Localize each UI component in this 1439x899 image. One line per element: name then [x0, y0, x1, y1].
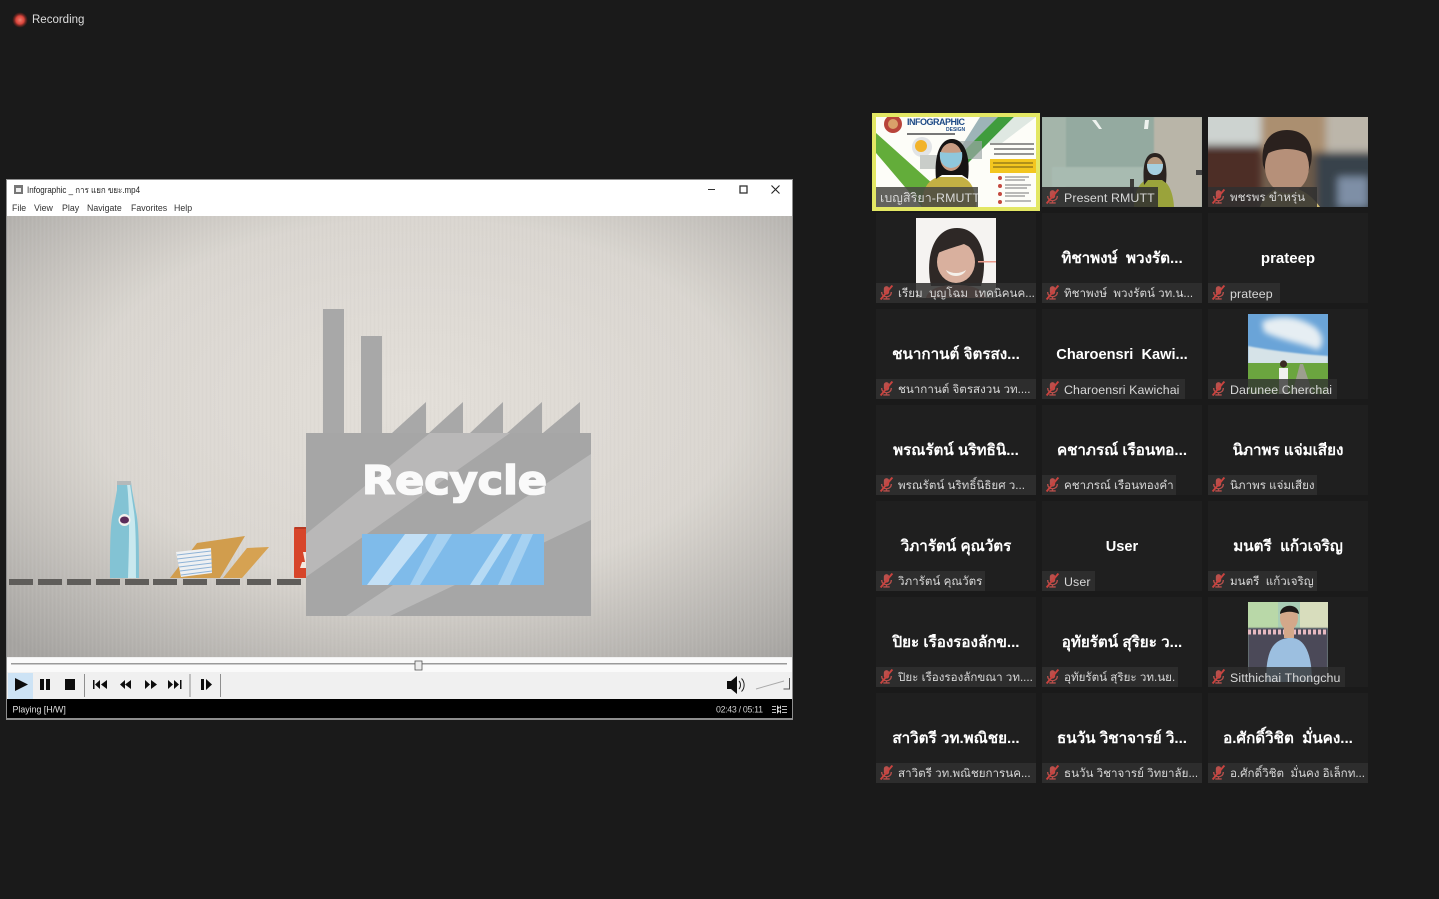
name label — [876, 379, 1036, 399]
icon: muted microphone — [880, 381, 894, 396]
menu bar: Play — [62, 203, 80, 213]
name label — [1042, 283, 1202, 303]
tile: มนตรี แก้วเจริญ — [1208, 501, 1368, 591]
tile: Present RMUTT — [1042, 117, 1202, 207]
name label: สาวิตรี วท.พณิชยการนค... — [898, 767, 1031, 780]
video: slide with presenter: DESIGN — [946, 127, 966, 133]
icon: recording dot — [12, 12, 28, 28]
video: participant — [1208, 117, 1368, 207]
avatar photo: field and sky — [1248, 314, 1328, 394]
name label — [876, 187, 978, 207]
tile: ทิชาพงษ์ พวงรัตน์ — [1042, 213, 1202, 303]
name label — [1042, 571, 1095, 591]
name label: ปิยะ เรืองรองลักขณา วท.... — [898, 671, 1033, 684]
icon: muted microphone — [1212, 765, 1226, 780]
name label: พรณรัตน์ นริทธิ์นิธิยศ ว... — [898, 479, 1025, 492]
status bar: Playing [H/W] — [12, 704, 66, 714]
name label — [1208, 283, 1280, 303]
icon: muted microphone — [1212, 573, 1226, 588]
name label: มนตรี แก้วเจริญ — [1230, 575, 1314, 588]
display name: ธนวัน วิชาจารย์ วิ... — [1057, 730, 1187, 747]
display name: อุทัยรัตน์ สุริยะ ว... — [1062, 634, 1182, 651]
icon: cardboard and paper — [170, 536, 269, 578]
display name: ทิชาพงษ์ พวงรัต... — [1061, 250, 1183, 267]
display name: อ.ศักดิ์วิชิต มั่นคง... — [1223, 730, 1353, 747]
panel: media player window — [6, 179, 793, 720]
icon: muted microphone — [1046, 189, 1059, 204]
name label: Darunee Cherchai — [1230, 383, 1332, 397]
tile: ชนากานต์ จิตรสงวน — [876, 309, 1036, 399]
name label: User — [1064, 575, 1091, 589]
status bar — [7, 699, 792, 718]
seek bar — [11, 661, 787, 670]
icon: muted microphone — [1212, 189, 1225, 204]
active speaker highlight — [872, 113, 1040, 211]
tile: เบญสิริยา-RMUTT (active speaker) — [876, 117, 1036, 207]
name label — [1208, 379, 1337, 399]
presenter — [922, 139, 976, 207]
icon: muted microphone — [1212, 669, 1226, 684]
name label — [1208, 763, 1368, 783]
tile: prateep — [1208, 213, 1368, 303]
name label — [876, 571, 985, 591]
name label: เรียม บุญโฉม เทคนิคนค... — [898, 287, 1035, 300]
icon: muted microphone — [1046, 285, 1060, 300]
transport buttons — [15, 678, 212, 691]
name label — [1042, 667, 1178, 687]
recording text: Recording — [32, 14, 84, 26]
name label — [1042, 763, 1202, 783]
factory window — [362, 534, 544, 585]
menu bar: File — [12, 203, 26, 213]
name label: Sitthichai Thongchu — [1230, 671, 1341, 685]
tile: ปิยะ เรืองรองลักขณา — [876, 597, 1036, 687]
icon: bottle — [110, 481, 139, 578]
name label — [1208, 571, 1317, 591]
icon: muted microphone — [1212, 477, 1226, 492]
display name: User — [1106, 539, 1138, 555]
icon: muted microphone — [1212, 381, 1226, 396]
display name: ปิยะ เรืองรองลักข... — [892, 634, 1020, 651]
name label — [876, 667, 1036, 687]
name label: prateep — [1230, 287, 1273, 301]
icon: muted microphone — [880, 285, 894, 300]
icon: muted microphone — [880, 765, 894, 780]
menu bar — [12, 203, 192, 213]
menu bar: View — [34, 203, 54, 213]
menu bar: Favorites — [131, 203, 168, 213]
factory sign: Recycle: Recycle — [362, 459, 547, 504]
menu bar: Help — [174, 203, 192, 213]
tile: เรียม บุญโฉม — [876, 213, 1036, 303]
factory building — [306, 309, 591, 616]
name label: พชรพร ขำหรุ่น — [1230, 191, 1305, 204]
name label — [1208, 475, 1317, 495]
name label: อ.ศักดิ์วิชิต มั่นคง อิเล็กท... — [1230, 767, 1365, 780]
name label: ธนวัน วิชาจารย์ วิทยาลัย... — [1064, 767, 1198, 780]
name label — [876, 283, 1036, 303]
icon: muted microphone — [1046, 381, 1060, 396]
tile: Sitthichai Thongchu — [1208, 597, 1368, 687]
name label — [876, 475, 1036, 495]
avatar photo: man with crowd — [1248, 602, 1328, 682]
name label: วิภารัตน์ คุณวัตร — [898, 575, 982, 588]
menu bar: Navigate — [87, 203, 122, 213]
display name: วิภารัตน์ คุณวัตร — [901, 538, 1011, 555]
display name: Charoensri Kawi... — [1056, 347, 1188, 363]
tile: ธนวัน วิชาจารย์ — [1042, 693, 1202, 783]
name label — [1042, 475, 1176, 495]
display name: ชนากานต์ จิตรสง... — [892, 346, 1020, 363]
tile: พชรพร ขำหรุ่น — [1208, 117, 1368, 207]
video frame: recycling animation — [7, 216, 792, 657]
video: slide with presenter — [876, 117, 1036, 207]
name label — [1208, 187, 1317, 207]
tile: อ.ศักดิ์วิชิต มั่นคง — [1208, 693, 1368, 783]
playback controls — [7, 657, 792, 699]
title bar — [14, 185, 780, 195]
name label: นิภาพร แจ่มเสียง — [1230, 479, 1315, 492]
name label: ทิชาพงษ์ พวงรัตน์ วท.น... — [1064, 287, 1193, 300]
display name: คชาภรณ์ เรือนทอ... — [1057, 442, 1187, 459]
tile: สาวิตรี วท.พณิชยการนค — [876, 693, 1036, 783]
name label: อุทัยรัตน์ สุริยะ วท.นย. — [1064, 671, 1175, 684]
tile: นิภาพร แจ่มเสียง — [1208, 405, 1368, 495]
name label: ชนากานต์ จิตรสงวน วท.... — [898, 383, 1030, 396]
display name: prateep — [1261, 250, 1315, 267]
icon: muted microphone — [880, 477, 894, 492]
conveyor belt — [9, 579, 301, 585]
tile: วิภารัตน์ คุณวัตร — [876, 501, 1036, 591]
avatar photo: smiling woman — [916, 218, 996, 298]
name label — [1042, 187, 1158, 207]
name label: เบญสิริยา-RMUTT — [880, 191, 978, 205]
tile: พรณรัตน์ นริทธิ์นิธิยศ — [876, 405, 1036, 495]
status bar: 02:43 / 05:11 — [716, 704, 763, 714]
display name: พรณรัตน์ นริทธินิ... — [893, 442, 1019, 459]
title bar: Infographic _ การ แยก ขยะ.mp4 — [27, 185, 140, 195]
tile: Darunee Cherchai — [1208, 309, 1368, 399]
name label: Present RMUTT — [1064, 191, 1155, 205]
name label — [1042, 379, 1185, 399]
display name: นิภาพร แจ่มเสียง — [1233, 442, 1343, 459]
tile: Charoensri Kawichai — [1042, 309, 1202, 399]
icon: muted microphone — [1046, 573, 1060, 588]
icon: muted microphone — [1046, 477, 1060, 492]
recording indicator — [12, 12, 84, 28]
name label: Charoensri Kawichai — [1064, 383, 1180, 397]
icon: muted microphone — [880, 669, 894, 684]
icon: muted microphone — [1212, 285, 1226, 300]
display name: สาวิตรี วท.พณิชย... — [892, 730, 1020, 747]
name label — [1208, 667, 1345, 687]
name label: คชาภรณ์ เรือนทองคำ — [1064, 479, 1174, 492]
video: slide with presenter: INFOGRAPHIC — [907, 117, 966, 127]
tile: User — [1042, 501, 1202, 591]
name label — [876, 763, 1036, 783]
icon: muted microphone — [1046, 669, 1060, 684]
icon: red can — [294, 527, 308, 578]
tile: อุทัยรัตน์ สุริยะ — [1042, 597, 1202, 687]
icon: volume — [727, 676, 790, 694]
icon: muted microphone — [1046, 765, 1060, 780]
video: room with presenter — [1042, 117, 1202, 207]
tile: คชาภรณ์ เรือนทองคำ — [1042, 405, 1202, 495]
icon: muted microphone — [880, 573, 894, 588]
display name: มนตรี แก้วเจริญ — [1233, 538, 1343, 555]
